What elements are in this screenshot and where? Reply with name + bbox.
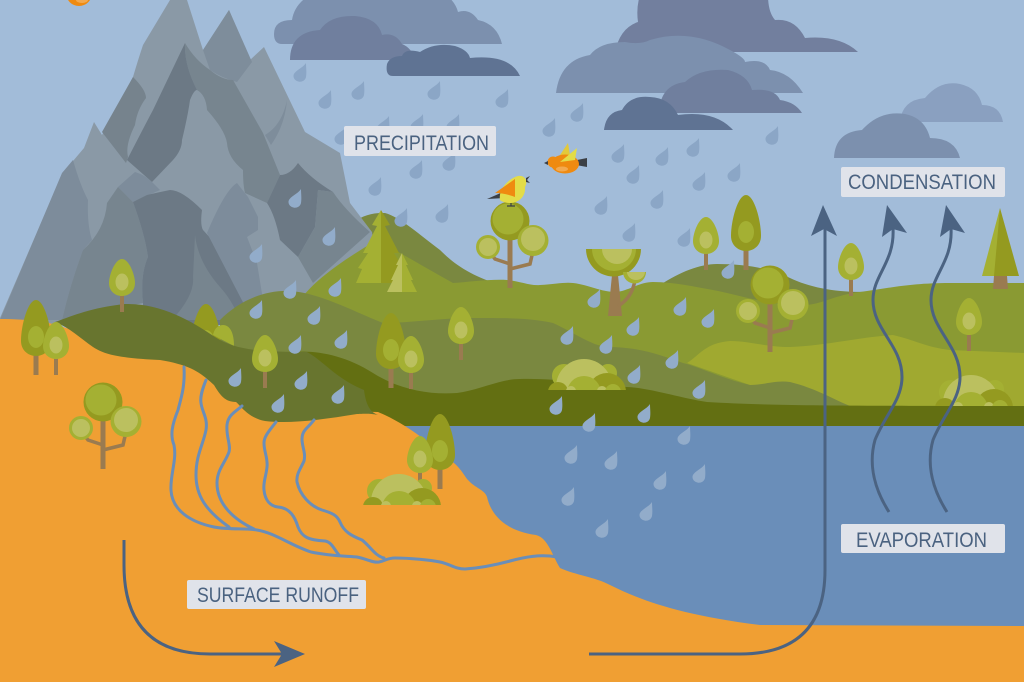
clouds: centre group [556,0,858,130]
rain: drops over land and lake [228,189,734,538]
tree: on mid hill [448,307,474,360]
clouds: left group [274,0,520,76]
tree: round on orange ground [69,382,142,469]
bush: orange ground [363,474,441,530]
tree: far right hill [956,298,982,351]
label: surface runoff [187,580,366,609]
label: condensation [841,167,1005,197]
back hills [320,213,893,310]
pine: far right [982,208,1019,289]
dark green foothill [55,304,378,422]
clouds: right group [834,83,1003,158]
pine: large [356,210,406,283]
tree pair: lake shore [407,414,455,489]
rain: drops in the sky [294,63,778,247]
lake [380,426,1024,682]
trees: right of centre [693,195,761,270]
mid olive hill [220,291,850,430]
tree pair: mid hill [376,313,424,389]
tree: umbrella [586,249,646,316]
bird: yellow perched [487,176,530,206]
label: surface runoff: SURFACE RUNOFF [197,584,359,607]
tree: round with yellow bird [476,202,548,288]
label: condensation: CONDENSATION [848,171,996,194]
bush: far right [935,375,1013,431]
arrow: evaporation wave 2 [930,205,965,512]
tree: behind arrows [838,243,864,296]
rivers: surface runoff streams [171,367,557,569]
tree group: far left [21,259,135,375]
bright green hill [300,240,1024,420]
label: precipitation [344,126,496,156]
trees behind the dark hill [191,304,234,379]
icon: sun [66,0,92,6]
tree: on dark green hill [252,335,278,388]
arrow: evaporation wave 1 [872,205,907,512]
orange ground [0,319,1024,682]
dark olive band [295,352,1024,426]
mountains [0,0,385,325]
bush: centre [548,359,626,415]
label: evaporation: EVAPORATION [856,529,987,552]
pines on the back hill [356,210,417,292]
tree: round right of centre [736,266,808,352]
pine: small [387,253,417,292]
arrow: surface runoff [124,540,305,667]
label: precipitation: PRECIPITATION [354,132,489,155]
arrow: runoff rising to condensation [589,205,837,654]
bird: orange flying [544,143,587,174]
yellow-green hill [687,335,1024,420]
